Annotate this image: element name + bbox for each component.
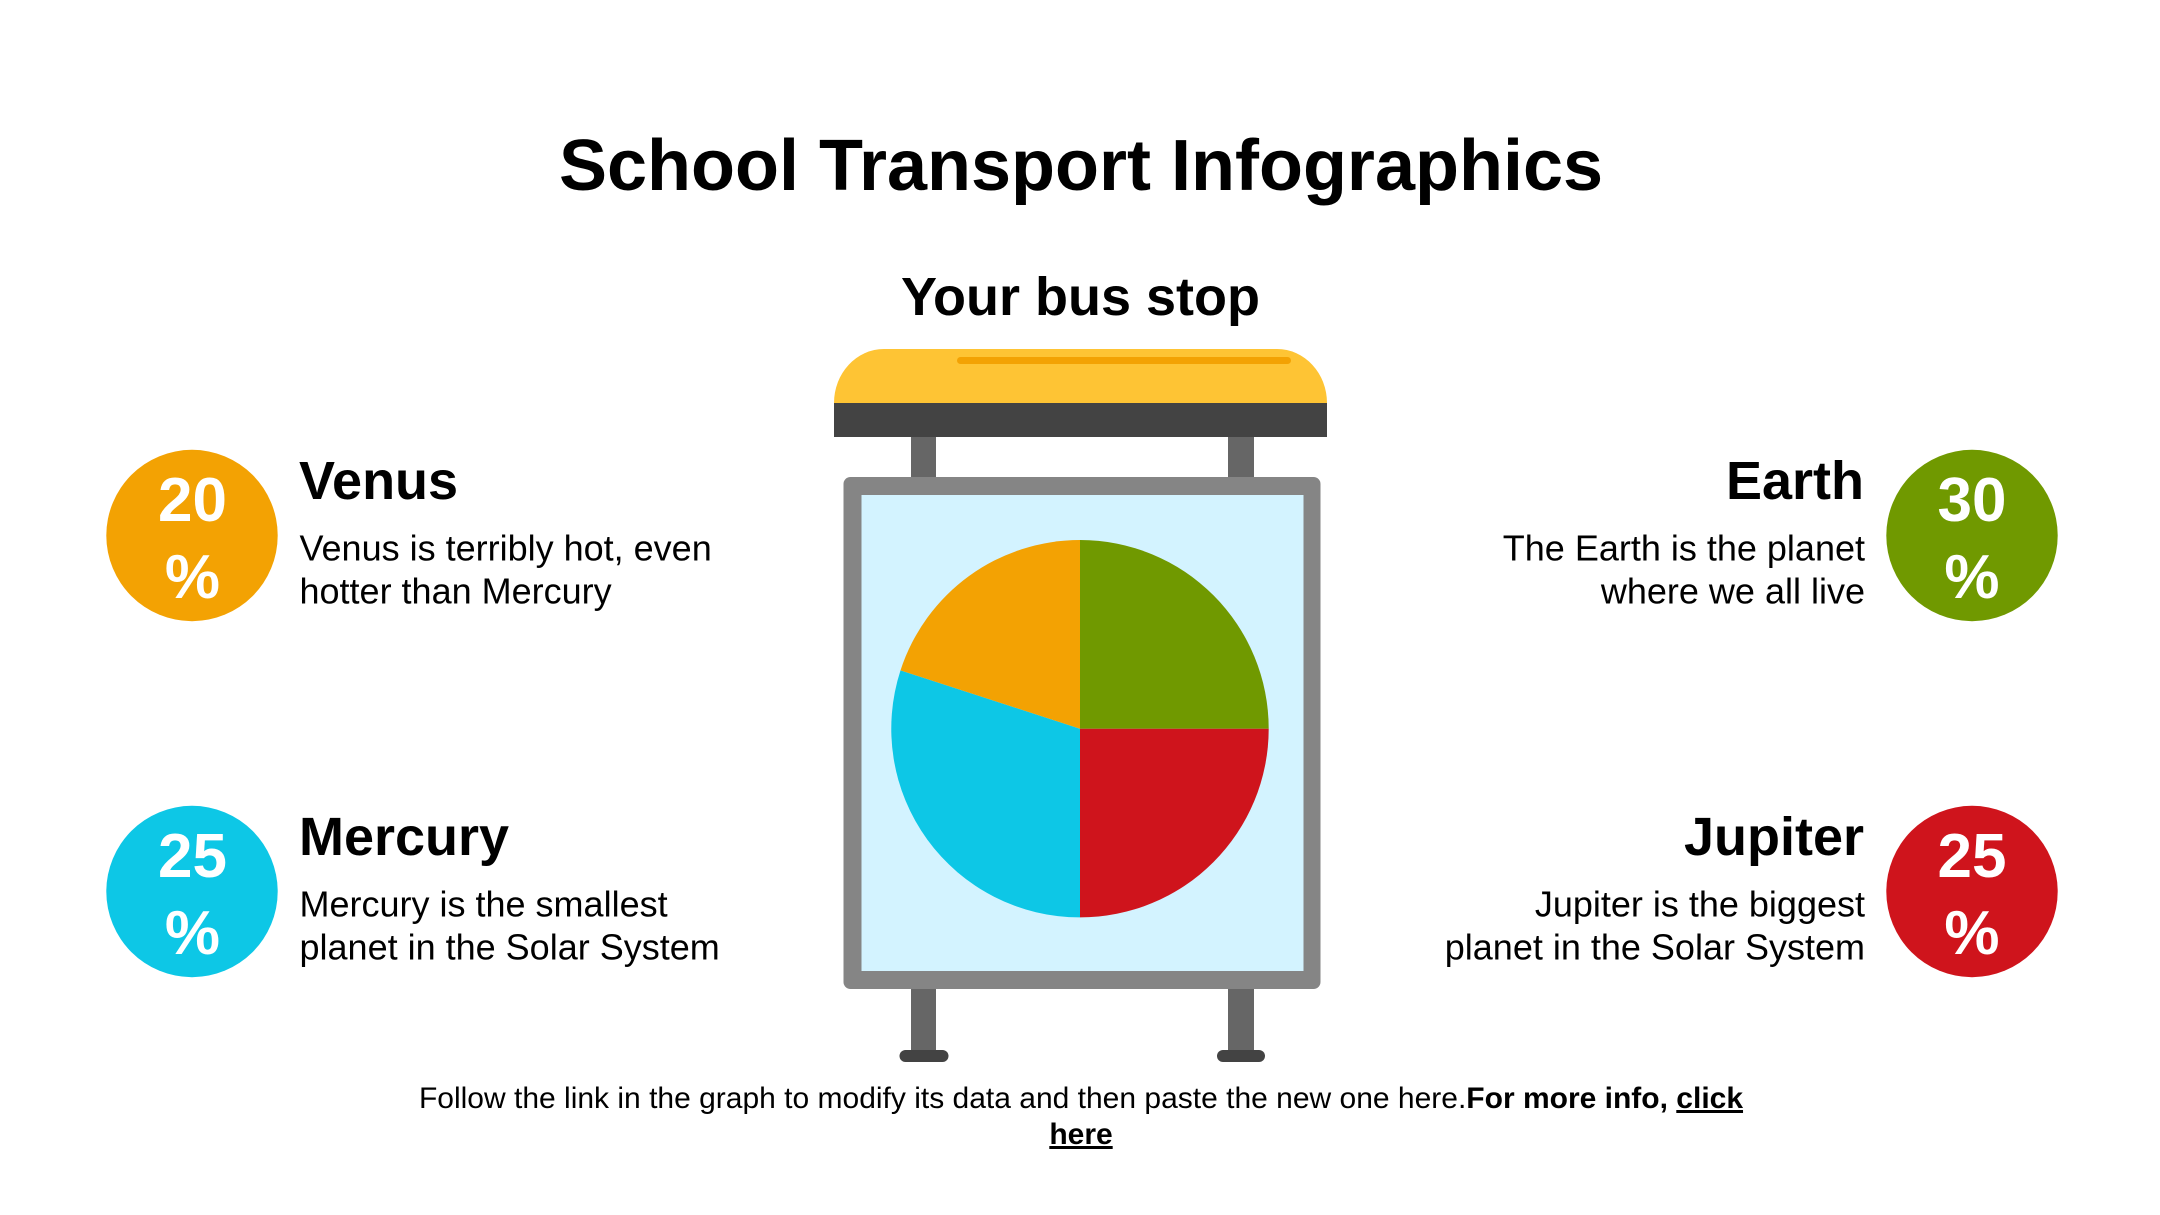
text: Jupiter description: Jupiter is the biggest bbox=[1535, 884, 1865, 924]
pie chart bbox=[891, 540, 1269, 917]
text: Mercury description bbox=[300, 884, 720, 968]
text: Earth description: where we all live bbox=[1600, 570, 1865, 612]
text: Earth description bbox=[1503, 528, 1865, 612]
sign panel bbox=[862, 495, 1304, 971]
slice: Venus bbox=[900, 540, 1080, 729]
badge: Earth 30%: % bbox=[1944, 543, 2000, 612]
text: Jupiter description bbox=[1445, 884, 1865, 968]
badge: Jupiter 25%: 25 bbox=[1938, 822, 2006, 891]
text: Venus description: Venus is terribly hot, even bbox=[300, 528, 712, 568]
slice: Jupiter bbox=[1080, 729, 1269, 917]
text: Mercury description: Mercury is the smallest bbox=[300, 884, 668, 924]
text: Mercury description: planet in the Solar System bbox=[300, 926, 720, 968]
badge: Venus 20%: 20 bbox=[158, 466, 227, 535]
footer note: here bbox=[1049, 1118, 1113, 1151]
footer note bbox=[419, 1082, 1743, 1151]
roof base band bbox=[834, 403, 1327, 437]
footer note: Follow the link in the graph to modify its data and then paste the new one here.For more info, click bbox=[419, 1082, 1743, 1115]
text: Venus description: hotter than Mercury bbox=[300, 570, 612, 612]
badge: Mercury 25%: 25 bbox=[158, 822, 227, 891]
roof canopy bbox=[834, 349, 1327, 403]
badge: Venus 20% bbox=[106, 450, 278, 621]
panel: Jupiter bbox=[1445, 806, 2058, 977]
text: Jupiter description: planet in the Solar System bbox=[1445, 926, 1865, 968]
bus stop feet bbox=[900, 1050, 1265, 1062]
sign frame bbox=[844, 477, 1320, 989]
text: Earth description: The Earth is the planet bbox=[1503, 528, 1865, 568]
panel: Earth bbox=[1503, 450, 2058, 621]
badge: Mercury 25% bbox=[106, 806, 278, 977]
bus stop lower legs bbox=[911, 988, 1254, 1051]
slice: Earth bbox=[1080, 540, 1269, 729]
chart heading: your bus stop: Your bus stop bbox=[901, 267, 1260, 327]
badge: Earth 30%: 30 bbox=[1938, 466, 2006, 535]
panel: Mercury bbox=[106, 806, 720, 977]
badge: Mercury 25%: % bbox=[165, 899, 220, 968]
bus stop upper posts bbox=[911, 437, 1254, 478]
heading: Jupiter: Jupiter bbox=[1684, 807, 1864, 867]
title: School Transport Infographics bbox=[559, 126, 1603, 206]
heading: Earth: Earth bbox=[1726, 451, 1864, 511]
panel: Venus bbox=[106, 450, 712, 621]
badge: Venus 20%: % bbox=[165, 543, 220, 612]
badge: Jupiter 25% bbox=[1886, 806, 2058, 977]
roof highlight stripe bbox=[957, 357, 1291, 364]
text: Venus description bbox=[300, 528, 712, 612]
heading: Venus: Venus bbox=[299, 451, 458, 511]
heading: Mercury: Mercury bbox=[299, 807, 509, 867]
badge: Earth 30% bbox=[1886, 450, 2058, 621]
badge: Jupiter 25%: % bbox=[1944, 899, 2000, 968]
slice: Mercury bbox=[891, 670, 1080, 917]
illustration: bus stop bbox=[834, 349, 1327, 1062]
